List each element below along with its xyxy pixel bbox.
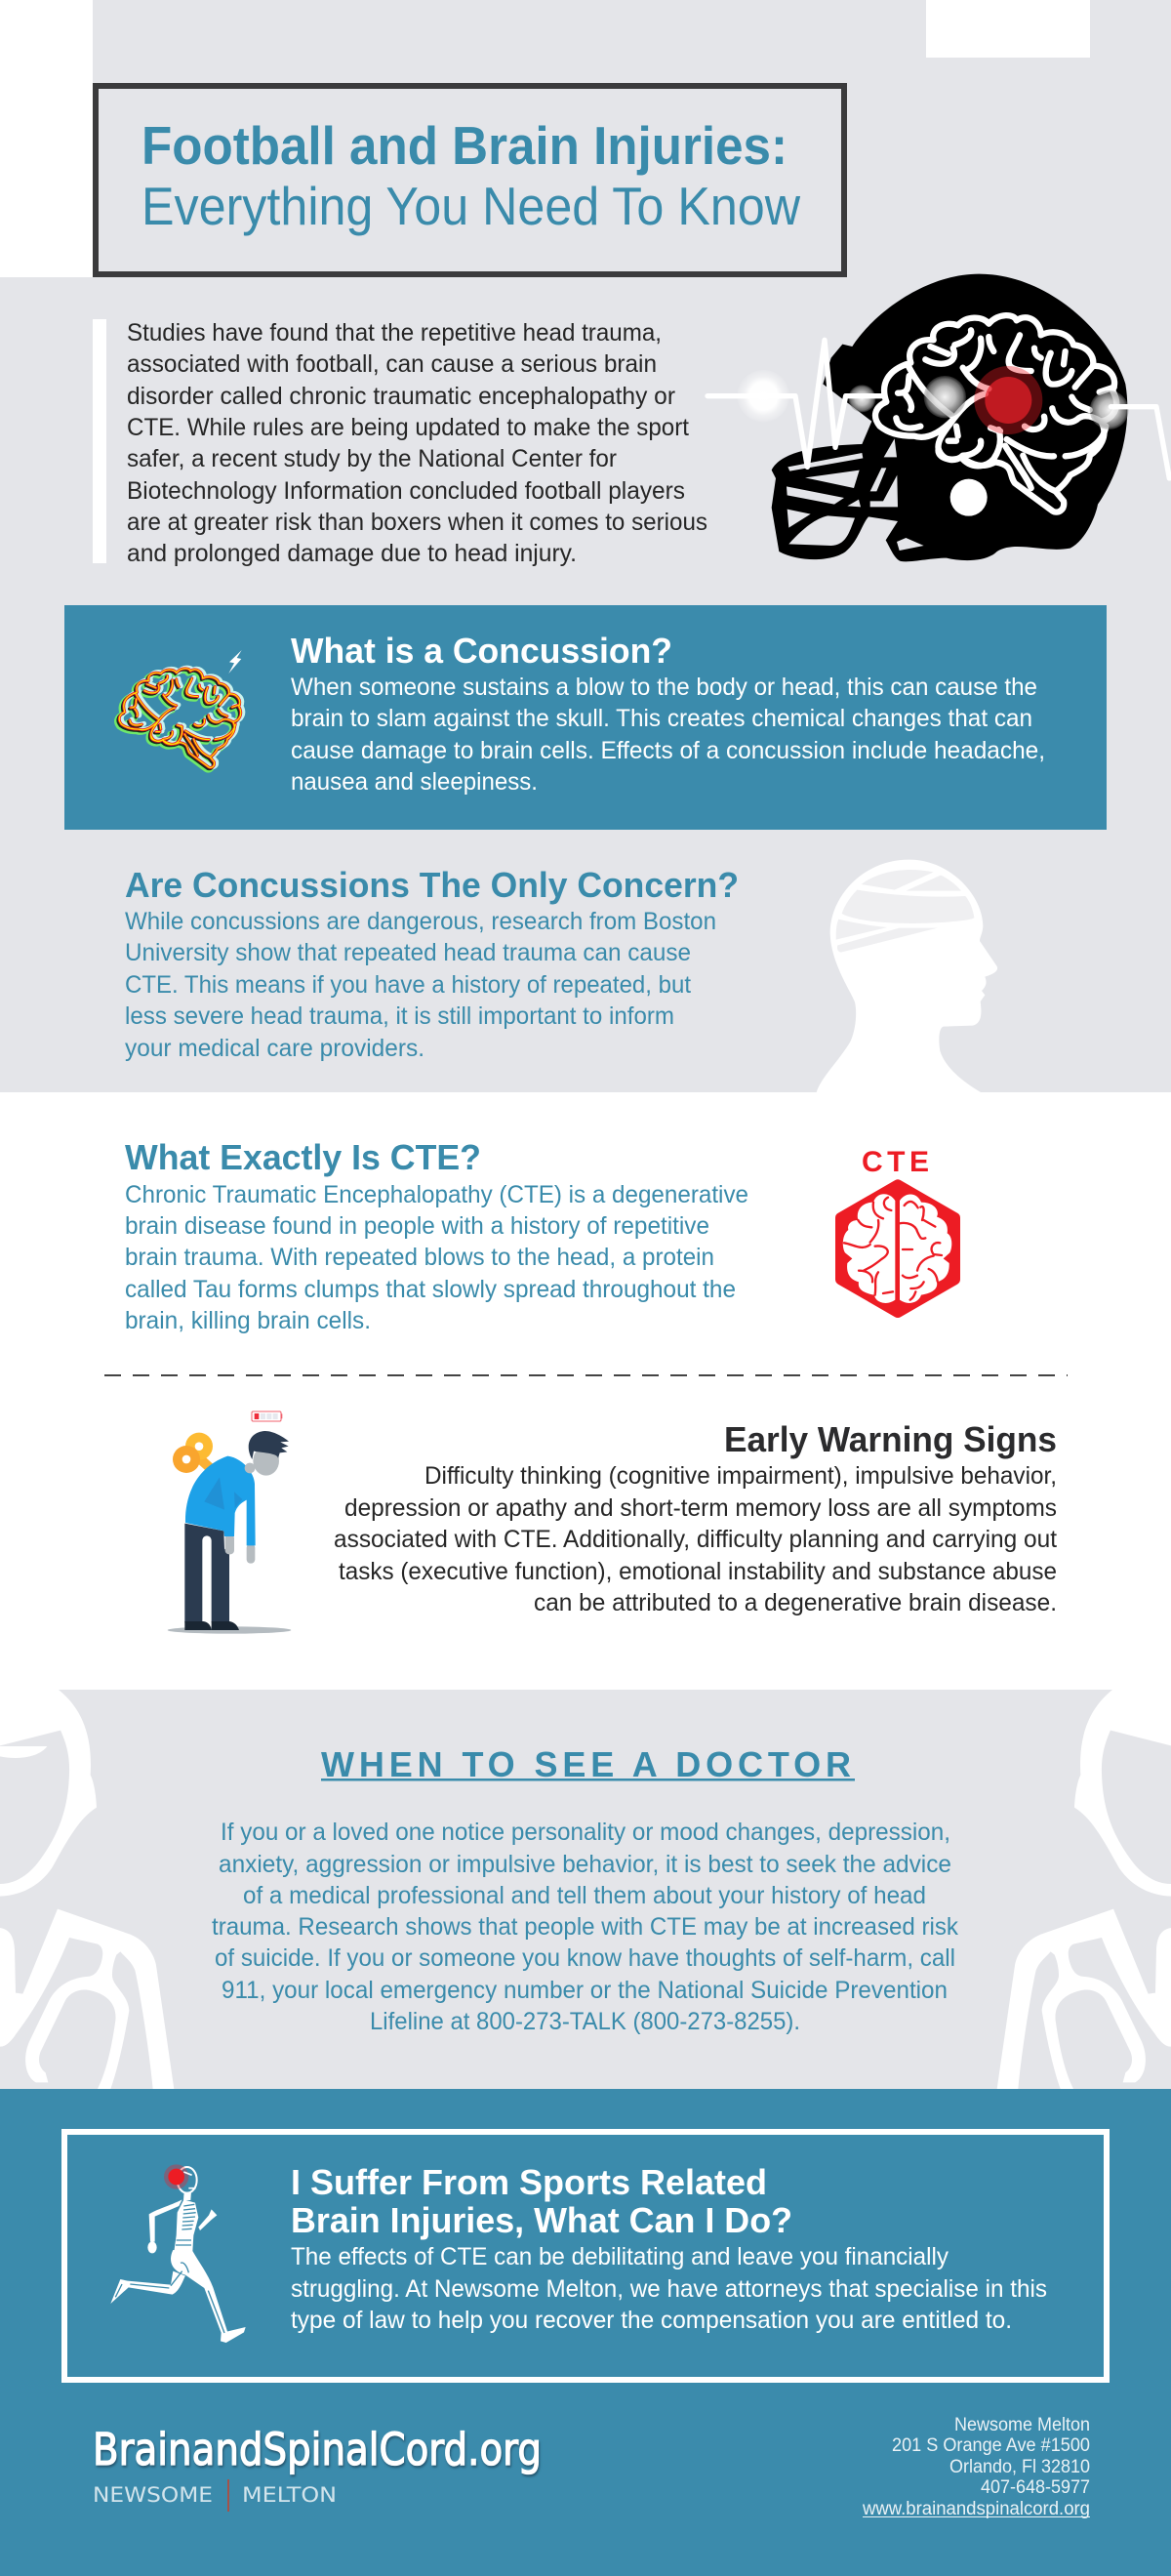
panel: are concussions the only concern: your medical care providers.: [125, 1035, 424, 1062]
title box: [96, 86, 844, 274]
panel: what exactly is CTE: called Tau forms clumps that slowly spread throughout the: [125, 1276, 736, 1303]
panel: what is a concussion: brain to slam against the skull. This creates chemical changes that can: [291, 705, 1032, 732]
panel: when to see a doctor background: [0, 1690, 1171, 2089]
panel: what exactly is CTE: brain trauma. With repeated blows to the head, a protein: [125, 1244, 714, 1271]
icon: doctor silhouette right: [997, 1690, 1171, 2089]
intro text block: are at greater risk than boxers when it comes to serious: [127, 509, 707, 536]
contact address block: 407-648-5977: [981, 2477, 1090, 2498]
panel: I suffer from sports related brain injuries: The effects of CTE can be debilitating and leave you financially: [291, 2243, 949, 2270]
text block: when to see a doctor: anxiety, aggression or impulsive behavior, it is best to seek the advice: [219, 1851, 951, 1878]
icon: bandaged head silhouette: [817, 860, 997, 1092]
panel: what exactly is CTE: Chronic Traumatic Encephalopathy (CTE) is a degenerative: [125, 1181, 748, 1208]
icon: colourful brain with lightning bolt: [117, 650, 243, 770]
panel: early warning signs: depression or apathy and short-term memory loss are all symptoms: [344, 1494, 1057, 1522]
panel: what is a concussion: cause damage to brain cells. Effects of a concussion include headache,: [291, 737, 1045, 764]
icon: football helmet with brain and heartbeat: [707, 274, 1169, 561]
panel: what exactly is CTE: What Exactly Is CTE?: [125, 1137, 481, 1177]
intro text block: CTE. While rules are being updated to make the sport: [127, 414, 689, 441]
logo: BrainandSpinalCord.org: NEWSOME: [93, 2483, 213, 2507]
panel: early warning signs: associated with CTE. Additionally, difficulty planning and carrying out: [334, 1526, 1057, 1553]
panel: early warning signs: Difficulty thinking (cognitive impairment), impulsive behavior,: [424, 1462, 1057, 1490]
text block: when to see a doctor: trauma. Research shows that people with CTE may be at increased risk: [212, 1913, 958, 1941]
intro text block: and prolonged damage due to head injury.: [127, 540, 577, 567]
decorative white strip left of title: [0, 0, 93, 277]
panel: are concussions the only concern: less severe head trauma, it is still important to inform: [125, 1002, 674, 1030]
intro text block: disorder called chronic traumatic encephalopathy or: [127, 383, 675, 410]
decorative white tab top right: [926, 0, 1090, 58]
text block: when to see a doctor: 911, your local emergency number or the National Suicide Prevention: [222, 1977, 948, 2004]
intro text block: Biotechnology Information concluded football players: [127, 477, 685, 505]
title box: Football and Brain Injuries:: [141, 115, 787, 176]
panel: are concussions the only concern: Are Concussions The Only Concern?: [125, 865, 739, 905]
contact address block: www.brainandspinalcord.org: [862, 2499, 1090, 2519]
panel: early warning signs: tasks (executive function), emotional instability and substance abuse: [339, 1558, 1057, 1585]
panel: are concussions the only concern: While concussions are dangerous, research from Boston: [125, 908, 716, 935]
panel: are concussions the only concern: CTE. This means if you have a history of repeated, but: [125, 971, 691, 999]
icon: CTE hexagon brain: [841, 1146, 954, 1312]
panel: early warning signs: can be attributed to a degenerative brain disease.: [534, 1589, 1057, 1616]
text block: when to see a doctor: If you or a loved one notice personality or mood changes, depression,: [221, 1819, 950, 1846]
intro text block: Studies have found that the repetitive head trauma,: [127, 319, 662, 347]
intro text block: safer, a recent study by the National Center for: [127, 445, 617, 472]
panel: what is a concussion: When someone sustains a blow to the body or head, this can cause the: [291, 674, 1037, 701]
intro text block: associated with football, can cause a serious brain: [127, 350, 657, 378]
text block: when to see a doctor: of suicide. If you or someone you know have thoughts of self-harm, call: [215, 1944, 955, 1972]
contact address block: Orlando, Fl 32810: [949, 2457, 1090, 2477]
dashed divider: [104, 1374, 1068, 1376]
panel: footer background: [0, 2089, 1171, 2576]
logo: BrainandSpinalCord.org: [93, 2424, 542, 2512]
contact address block: [862, 2415, 1090, 2519]
icon: tired wind-up man with low battery: [168, 1411, 291, 1634]
text block: when to see a doctor: Lifeline at 800-273-TALK (800-273-8255).: [370, 2008, 800, 2035]
panel: I suffer from sports related brain injuries: type of law to help you recover the compensation you are entitled to.: [291, 2307, 1012, 2334]
panel: early warning signs: [334, 1419, 1057, 1616]
intro text block: [93, 319, 707, 567]
panel: what exactly is CTE: brain, killing brain cells.: [125, 1307, 371, 1334]
logo: BrainandSpinalCord.org: BrainandSpinalCord.org: [93, 2424, 542, 2475]
panel: what is a concussion: nausea and sleepiness.: [291, 768, 538, 796]
panel: I suffer from sports related brain injuries: [64, 2132, 1107, 2380]
panel: I suffer from sports related brain injuries: I Suffer From Sports Related: [291, 2162, 767, 2202]
title box: Everything You Need To Know: [141, 176, 800, 236]
panel: are concussions the only concern: University show that repeated head trauma can cause: [125, 939, 691, 966]
text block: when to see a doctor: [212, 1819, 958, 2035]
contact address block: Newsome Melton: [954, 2415, 1090, 2435]
icon: doctor silhouette left: [0, 1690, 174, 2089]
text block: when to see a doctor: of a medical professional and tell them about your history of head: [243, 1882, 926, 1909]
contact address block: 201 S Orange Ave #1500: [892, 2435, 1090, 2456]
panel: I suffer from sports related brain injuries: struggling. At Newsome Melton, we have attorneys that specialise in this: [291, 2275, 1047, 2303]
panel: are concussions the only concern: [125, 865, 739, 1062]
icon: running skeleton with head injury: [110, 2164, 246, 2343]
panel: early warning signs: Early Warning Signs: [724, 1419, 1057, 1459]
panel: I suffer from sports related brain injuries: Brain Injuries, What Can I Do?: [291, 2200, 792, 2240]
logo: BrainandSpinalCord.org: MELTON: [242, 2483, 337, 2507]
panel: top grey background: [0, 0, 1171, 1092]
panel: what exactly is CTE: brain disease found in people with a history of repetitive: [125, 1212, 709, 1240]
panel: what is a concussion: What is a Concussion?: [291, 631, 672, 671]
panel: what is a concussion: [64, 605, 1107, 830]
panel: what exactly is CTE: [125, 1137, 748, 1334]
heading: when to see a doctor: WHEN TO SEE A DOCTOR: [321, 1744, 851, 1784]
icon: CTE hexagon brain: CTE: [862, 1146, 929, 1178]
